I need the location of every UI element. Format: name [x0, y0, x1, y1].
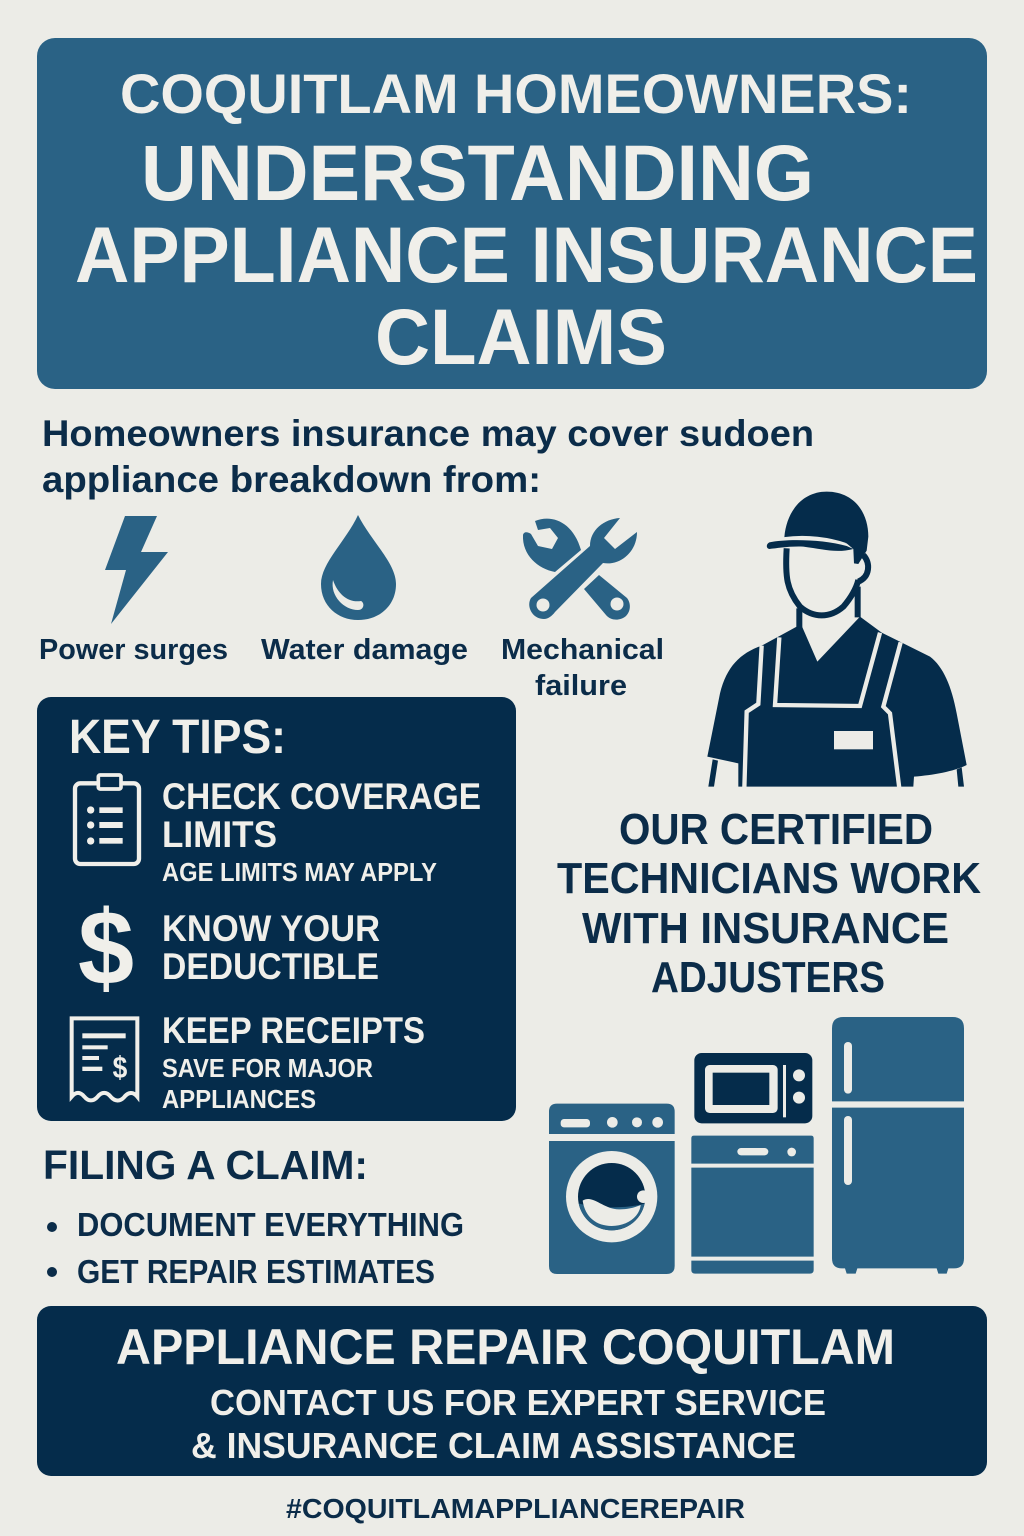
tip: check coverage limits: CHECK COVERAGE: [162, 776, 481, 817]
tip: know your deductible: KNOW YOUR: [162, 908, 380, 949]
bullet: get repair estimates: GET REPAIR ESTIMATES: [77, 1253, 435, 1290]
illustration: appliances: [549, 1017, 964, 1274]
callout: certified technicians: [557, 805, 981, 1002]
label: water damage: Water damage: [261, 634, 468, 666]
tip: keep receipts: APPLIANCES: [162, 1084, 316, 1114]
illustration: technician: [707, 492, 967, 788]
intro text: Homeowners insurance may cover sudoen: [42, 413, 814, 454]
bullet: document everything: DOCUMENT EVERYTHING: [77, 1206, 464, 1243]
callout: certified technicians: ADJUSTERS: [651, 953, 885, 1002]
footer banner: [37, 1306, 987, 1476]
footer contact text: & INSURANCE CLAIM ASSISTANCE: [191, 1425, 796, 1466]
intro text: appliance breakdown from:: [42, 459, 541, 500]
header banner: [37, 38, 987, 389]
heading: filing a claim: FILING A CLAIM:: [43, 1142, 368, 1188]
refrigerator: [832, 1017, 964, 1274]
callout: certified technicians: TECHNICIANS WORK: [557, 854, 981, 903]
icon: dollar sign: $: [78, 889, 134, 1007]
callout: certified technicians: OUR CERTIFIED: [619, 805, 933, 854]
intro text: [42, 413, 814, 500]
section: filing a claim: [43, 1142, 464, 1290]
panel: key tips: [37, 697, 516, 1121]
tip: know your deductible: DEDUCTIBLE: [162, 946, 379, 987]
tip: keep receipts: [162, 1010, 425, 1114]
label: power surges: Power surges: [39, 634, 228, 666]
title line: Claims: CLAIMS: [375, 292, 667, 381]
washing machine: [549, 1104, 675, 1274]
dishwasher: [691, 1136, 814, 1274]
technician cap: [784, 492, 868, 564]
title line: Coquitlam homeowners: COQUITLAM HOMEOWNERS:: [120, 62, 912, 125]
tip: keep receipts: KEEP RECEIPTS: [162, 1010, 425, 1051]
icon: water drop: [321, 515, 396, 620]
icon: lightning bolt: [105, 516, 168, 624]
tip: know your deductible: [162, 908, 380, 987]
icon: receipt: [72, 1018, 137, 1101]
title line: Appliance insurance: APPLIANCE INSURANCE: [75, 210, 978, 299]
callout: certified technicians: WITH INSURANCE: [582, 904, 949, 953]
tip: check coverage limits: AGE LIMITS MAY APPLY: [162, 857, 437, 887]
footer contact text: [191, 1382, 826, 1466]
tip: keep receipts: SAVE FOR MAJOR: [162, 1053, 373, 1083]
footer contact text: CONTACT US FOR EXPERT SERVICE: [210, 1382, 826, 1423]
title line: Understanding: UNDERSTANDING: [141, 128, 814, 217]
technician head outline: [786, 548, 868, 627]
tip: check coverage limits: LIMITS: [162, 814, 277, 855]
label: mechanical failure: failure: [535, 670, 627, 702]
label: mechanical failure: Mechanical: [501, 634, 664, 666]
microwave: [694, 1053, 812, 1123]
icon: crossed wrenches: [523, 518, 637, 620]
label: mechanical failure: [501, 634, 664, 702]
tip: check coverage limits: [162, 776, 481, 887]
icon: clipboard checklist: [75, 775, 139, 864]
heading: key tips: KEY TIPS:: [69, 711, 286, 764]
hashtag: #COQUITLAMAPPLIANCEREPAIR: [286, 1493, 745, 1524]
footer heading: APPLIANCE REPAIR COQUITLAM: [116, 1319, 895, 1375]
technician torso: [707, 617, 967, 787]
icon: receipt: $: [113, 1050, 127, 1084]
